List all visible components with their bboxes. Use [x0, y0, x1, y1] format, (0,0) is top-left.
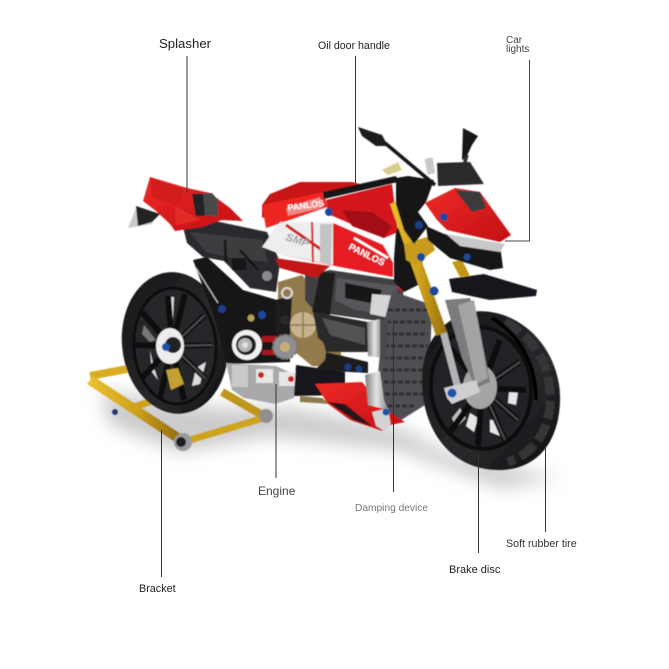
fuel tank red and PANLOS stripe: PANLOS [287, 198, 325, 213]
dark chest behind fork [394, 218, 425, 292]
headlight underside [426, 226, 505, 270]
ground shadow [100, 392, 560, 488]
front rim and brake disc [425, 322, 537, 454]
radiator [378, 291, 432, 422]
silver engine guards [367, 319, 388, 362]
leader line: splasher [186, 56, 188, 193]
front rim light gaps [452, 392, 518, 436]
frame detail [190, 232, 272, 281]
leader line: damping device [392, 325, 394, 492]
leader line: soft rubber tire [544, 445, 546, 532]
rear wheel light gaps [142, 297, 206, 386]
label: Oil door handle: Oil door handle [318, 40, 390, 52]
rear wheel [115, 267, 235, 419]
label: Car lights: Car [506, 35, 523, 46]
subframe [183, 220, 280, 292]
leader line: oil door handle [354, 56, 356, 183]
gold fork [390, 200, 470, 336]
side fairing panel [262, 222, 393, 278]
red headlight fairing [425, 188, 511, 242]
motorcycle illustration [90, 127, 560, 488]
label: Car lights: lights [506, 44, 529, 55]
handlebar and mirrors [358, 127, 484, 244]
leader line: brake disc [478, 455, 480, 553]
sprocket gears [273, 288, 316, 359]
swingarm and rear frame [193, 257, 290, 364]
label: Brake disc: Brake disc [449, 564, 501, 576]
front mudguard [449, 274, 537, 300]
leader line: car lights [505, 60, 530, 241]
tan engine block [275, 275, 345, 368]
label: Engine: Engine [258, 484, 296, 498]
label: Damping device: Damping device [355, 503, 428, 514]
leader line: bracket [160, 430, 162, 577]
label: Soft rubber tire: Soft rubber tire [506, 538, 577, 550]
tail and splasher [128, 177, 243, 231]
fuel tank red and PANLOS stripe [262, 176, 398, 238]
rear hub [232, 330, 262, 360]
label: Bracket: Bracket [139, 583, 176, 595]
label: Splasher: Splasher [159, 36, 212, 51]
front tire [422, 311, 560, 470]
engine [305, 270, 406, 373]
leader line: engine [275, 384, 277, 478]
lower red fairing [315, 371, 405, 431]
side fairing panel: SMP [284, 231, 311, 250]
side fairing panel: PANLOS [347, 242, 386, 269]
exhaust silver section [226, 363, 345, 404]
front fork and silver guard [443, 298, 490, 404]
bracket stand [90, 369, 273, 451]
